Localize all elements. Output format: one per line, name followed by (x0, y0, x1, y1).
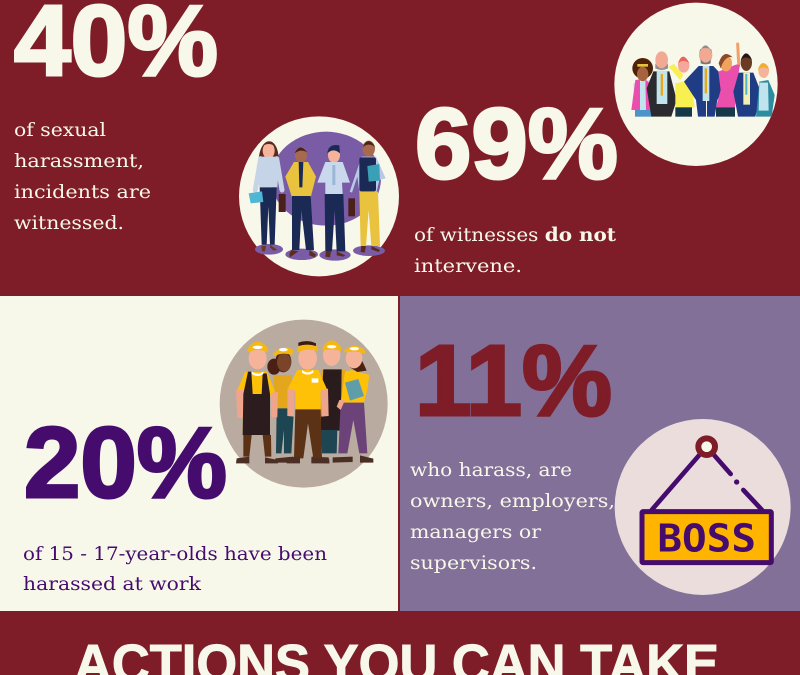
text: 69% description: of witnesses do not (414, 224, 616, 246)
colleague: woman in yellow (669, 57, 695, 117)
worker 2 (285, 147, 316, 257)
illustration: four office workers in circle (239, 116, 399, 276)
text: 69% description (414, 224, 616, 277)
colleague: woman in magenta raising hand (716, 44, 740, 117)
worker left with apron (236, 342, 278, 463)
text: 20% description (23, 543, 327, 595)
icon: boss sign in circle (615, 419, 791, 595)
text: 40% description: incidents are (14, 181, 151, 203)
text: 20% description: of 15 - 17-year-olds have been (23, 543, 327, 565)
text: 40% description: of sexual (14, 119, 106, 141)
worker 4 (350, 141, 386, 253)
illustration: diverse group of colleagues in circle (614, 3, 778, 166)
sign text: BOSS (657, 517, 756, 562)
text: 20% description: harassed at work (23, 573, 202, 595)
colleague: bald man with beard (647, 51, 677, 117)
stat: 69%: 69% (415, 88, 618, 200)
text: 69% description: intervene. (414, 255, 522, 277)
worker 3 (317, 145, 355, 257)
text: 11% description: owners, employers, (410, 490, 615, 512)
panel: 11% bosses (400, 296, 800, 611)
panel: 40% and 69% witnesses (0, 0, 800, 296)
divider between lower panels (398, 296, 400, 611)
worker right with clipboard (333, 346, 373, 463)
colleague: grey-haired man in navy (684, 45, 728, 117)
colleague: blonde woman in teal (756, 63, 775, 117)
worker behind right (312, 340, 348, 463)
text: 40% description: harassment, (14, 150, 144, 172)
text: 11% description (410, 459, 615, 574)
text: 40% description: witnessed. (14, 212, 124, 234)
text: 40% description (14, 119, 151, 234)
panel: 20% young workers (0, 296, 398, 611)
text: 11% description: managers or (410, 521, 542, 543)
stat: 20%: 20% (24, 407, 227, 519)
text: 11% description: who harass, are (410, 459, 572, 481)
worker centre (287, 341, 329, 463)
panel: actions heading (0, 611, 800, 675)
text: 11% description: supervisors. (410, 552, 537, 574)
colleague: woman in pink (631, 58, 653, 117)
worker 1 (249, 141, 286, 251)
colleague: man with glasses (733, 53, 761, 117)
worker behind left (267, 347, 294, 463)
illustration: five young workers in yellow caps (220, 320, 388, 488)
stat: 11%: 11% (415, 325, 612, 437)
